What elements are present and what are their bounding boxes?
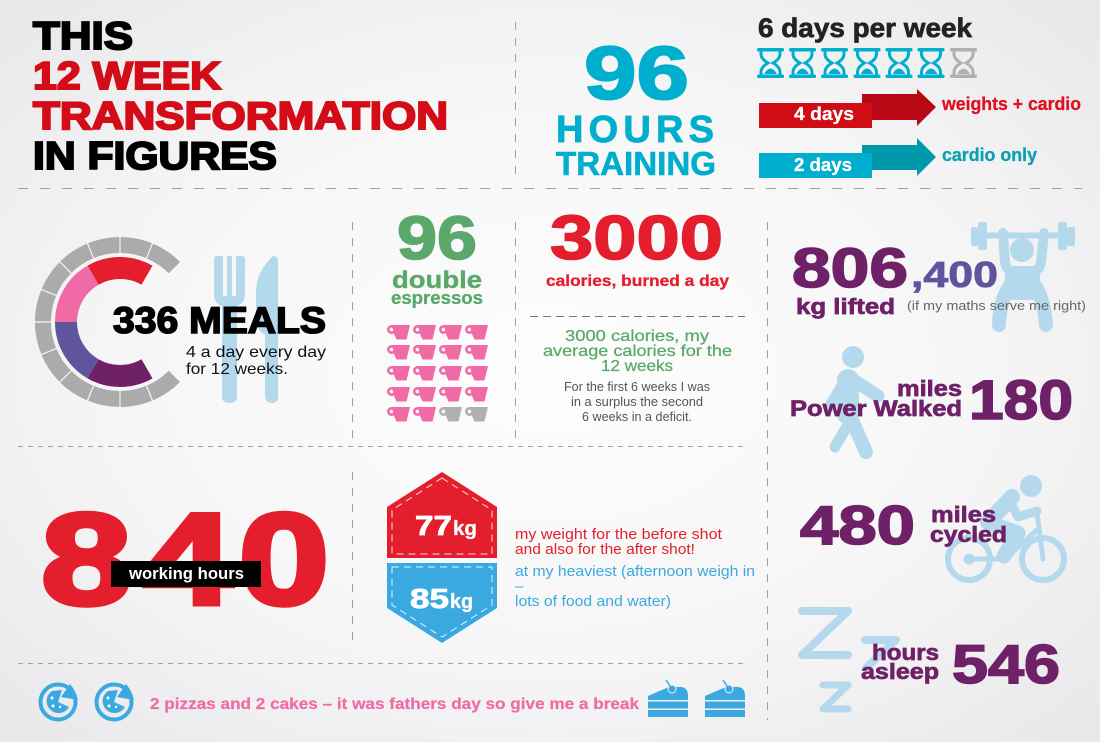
icon: fork and knife: [214, 256, 278, 403]
806,400 kg lifted: [792, 236, 1086, 319]
6 days per week heading: 6 days per week: [758, 13, 973, 43]
average calories text: 12 weeks: [601, 358, 673, 375]
title: THIS: [33, 15, 133, 58]
3000 calories burned: calories, burned a day: [546, 273, 729, 290]
icons: cakes: [648, 680, 745, 717]
meals donut chart: [33, 235, 174, 409]
weight note: heaviest: lots of food and water): [515, 593, 671, 610]
546 hours asleep: 546: [952, 633, 1060, 695]
weight note: before and after: my weight for the before shot: [515, 526, 723, 543]
480 miles cycled: 480: [800, 494, 915, 556]
icon: weightlifter: [971, 222, 1075, 325]
icon: power walker: [831, 346, 878, 452]
arrow: 4 days weights + cardio: [759, 89, 1081, 128]
96 double espressos: [391, 204, 483, 308]
weight note: heaviest: [515, 563, 755, 610]
96 hours training: HOURS: [556, 109, 714, 151]
icon grid: espresso cups: [388, 325, 488, 422]
480 miles cycled: miles: [931, 502, 996, 527]
96 hours training: 96: [584, 31, 689, 115]
96 hours training: [556, 31, 716, 182]
average calories text: 3000 calories, my: [565, 328, 709, 345]
surplus and deficit note: [564, 380, 710, 424]
336 meals label: 336 MEALS: [113, 300, 326, 341]
96 hours training: TRAINING: [556, 145, 716, 182]
546 hours asleep: hours: [872, 640, 939, 665]
surplus and deficit note: For the first 6 weeks I was: [564, 380, 710, 394]
840 working hours: working hours: [128, 564, 244, 583]
546 hours asleep: [861, 633, 1060, 695]
hourglass row: [757, 48, 977, 78]
badge: 77kg: 77: [415, 510, 452, 541]
96 double espressos: double: [392, 267, 482, 294]
title: 12 WEEK: [33, 55, 221, 98]
title: IN FIGURES: [33, 135, 277, 178]
180 miles power walked: 180: [969, 368, 1073, 431]
surplus and deficit note: in a surplus the second: [571, 395, 703, 409]
weight note: heaviest: at my heaviest (afternoon weigh in: [515, 563, 755, 580]
180 miles power walked: Power Walked: [790, 396, 962, 421]
badge: 77kg: [387, 472, 497, 558]
title: TRANSFORMATION: [33, 95, 448, 138]
pizzas and cakes caption: 2 pizzas and 2 cakes – it was fathers day so give me a break: [150, 696, 639, 713]
badge: 77kg: kg: [453, 518, 477, 540]
arrow: 2 days cardio only: [759, 138, 1037, 178]
180 miles power walked: miles: [897, 376, 962, 401]
badge: 85kg: 85: [410, 583, 449, 614]
arrow: 2 days cardio only: cardio only: [942, 145, 1037, 165]
546 hours asleep: asleep: [861, 659, 939, 684]
arrow: 2 days cardio only: 2 days: [794, 155, 852, 175]
3000 calories burned: [546, 204, 729, 290]
480 miles cycled: [800, 494, 1007, 556]
806,400 kg lifted: ,400: [911, 254, 998, 295]
336 meals label: for 12 weeks.: [186, 361, 288, 378]
icon: sleeping Z letters: [802, 611, 896, 709]
surplus and deficit note: 6 weeks in a deficit.: [582, 410, 692, 424]
badge: 85kg: kg: [450, 591, 473, 613]
icons: pizzas: [40, 684, 134, 720]
arrow: 4 days weights + cardio: weights + cardio: [941, 94, 1081, 114]
96 double espressos: espressos: [391, 288, 483, 308]
96 double espressos: 96: [397, 204, 477, 272]
336 meals label: [113, 300, 326, 378]
title: [33, 15, 448, 178]
480 miles cycled: cycled: [930, 522, 1007, 547]
806,400 kg lifted: kg lifted: [796, 294, 895, 319]
weight note: before and after: and also for the after shot!: [515, 541, 695, 558]
806,400 kg lifted: (if my maths serve me right): [907, 298, 1086, 313]
weight note: before and after: [515, 526, 723, 558]
weight note: heaviest: –: [515, 578, 524, 595]
arrow: 4 days weights + cardio: 4 days: [794, 104, 854, 124]
336 meals label: 4 a day every day: [186, 344, 326, 361]
3000 calories burned: 3000: [550, 204, 723, 273]
180 miles power walked: [790, 368, 1073, 431]
icon: cyclist: [948, 475, 1064, 580]
average calories text: [543, 328, 732, 375]
badge: 85kg: [387, 563, 497, 643]
840 working hours: 840: [41, 487, 329, 632]
average calories text: average calories for the: [543, 343, 732, 360]
806,400 kg lifted: 806: [792, 236, 908, 299]
